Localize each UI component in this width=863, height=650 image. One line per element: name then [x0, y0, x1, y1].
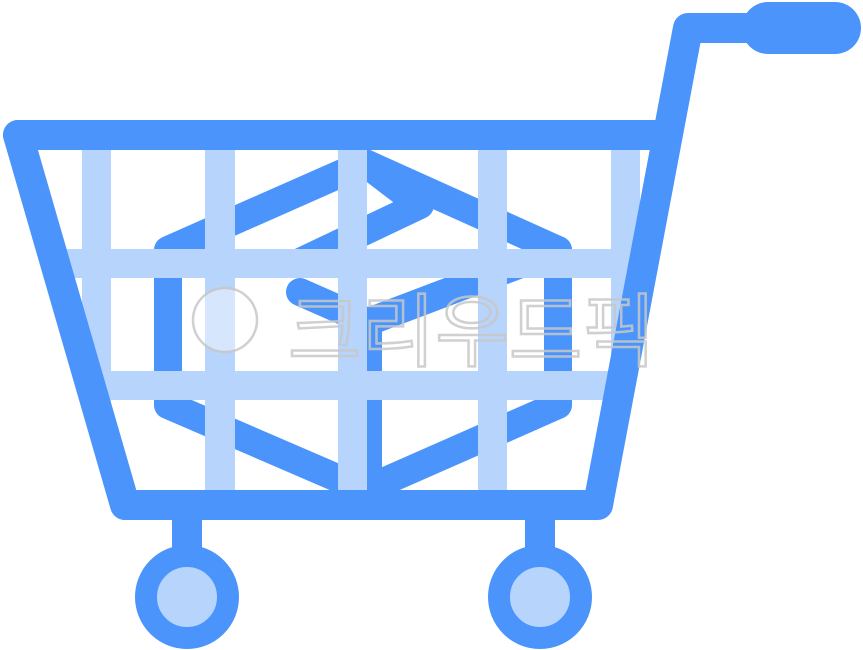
cube inside cart: [168, 163, 558, 490]
wheel right: [499, 556, 581, 638]
handle grip: [742, 2, 861, 54]
cart frame: [18, 28, 748, 560]
wheel left: [146, 556, 228, 638]
cart grid bars: [40, 150, 640, 490]
watermark: 크리우드픽: [288, 288, 656, 377]
